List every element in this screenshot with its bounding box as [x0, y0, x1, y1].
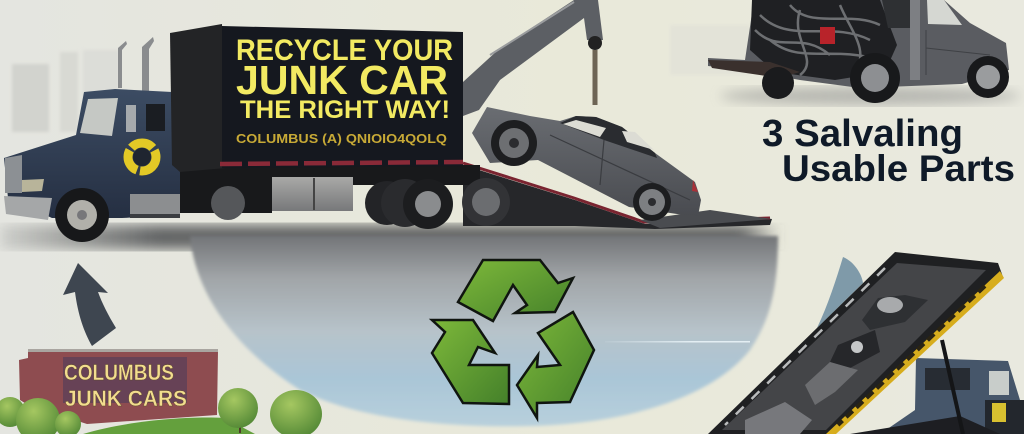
cab	[4, 89, 180, 220]
tow truck with tilted flatbed	[708, 252, 1024, 434]
towed car	[472, 107, 701, 221]
car greenhouse	[560, 116, 657, 158]
box headline: THE RIGHT WAY!	[240, 96, 450, 124]
box side	[222, 26, 463, 168]
pool highlight	[605, 341, 750, 342]
truck	[4, 24, 510, 242]
box headline: RECYCLE YOUR	[236, 34, 453, 67]
ramp	[463, 163, 772, 229]
grass	[83, 418, 255, 434]
ground shadow	[0, 225, 780, 249]
step heading: salvaging parts: Usable Parts	[782, 148, 1015, 189]
top arrow	[458, 260, 573, 321]
door logo	[128, 143, 156, 171]
arrow up	[63, 263, 116, 346]
building sign	[64, 360, 187, 411]
box front	[170, 24, 226, 172]
building sign: COLUMBUS	[64, 360, 174, 385]
background skyline	[12, 25, 750, 132]
right arrow	[517, 312, 594, 418]
yellow edge	[826, 271, 1004, 434]
car windows	[563, 120, 654, 150]
step heading: salvaging parts: 3 Salvaling	[762, 113, 963, 155]
frame	[180, 165, 480, 213]
scrap metal parts	[745, 295, 928, 434]
building sign: JUNK CARS	[65, 386, 187, 411]
support strut	[942, 340, 963, 434]
water pool	[190, 236, 778, 426]
salvage car	[708, 0, 1020, 105]
step heading: salvaging parts	[762, 113, 1015, 189]
red reflective stripe	[220, 162, 463, 164]
left arrow	[432, 320, 509, 404]
exhaust stacks	[118, 37, 154, 130]
recycling symbol	[432, 260, 594, 418]
box headline: COLUMBUS (A) QNIOIO4QOLQ	[236, 131, 447, 146]
crane arm	[463, 0, 603, 116]
small truck cab	[850, 358, 1024, 434]
box headline	[236, 34, 453, 146]
columbus building	[19, 349, 218, 424]
fuel tank	[211, 177, 353, 220]
blue fin arrow	[817, 257, 863, 328]
trees	[0, 388, 322, 434]
side rail lights	[725, 268, 885, 425]
flatbed	[708, 252, 1003, 434]
engine parts	[750, 0, 897, 80]
front wheel	[55, 188, 109, 242]
rear wheels	[365, 178, 510, 229]
box headline: JUNK CAR	[236, 57, 448, 103]
